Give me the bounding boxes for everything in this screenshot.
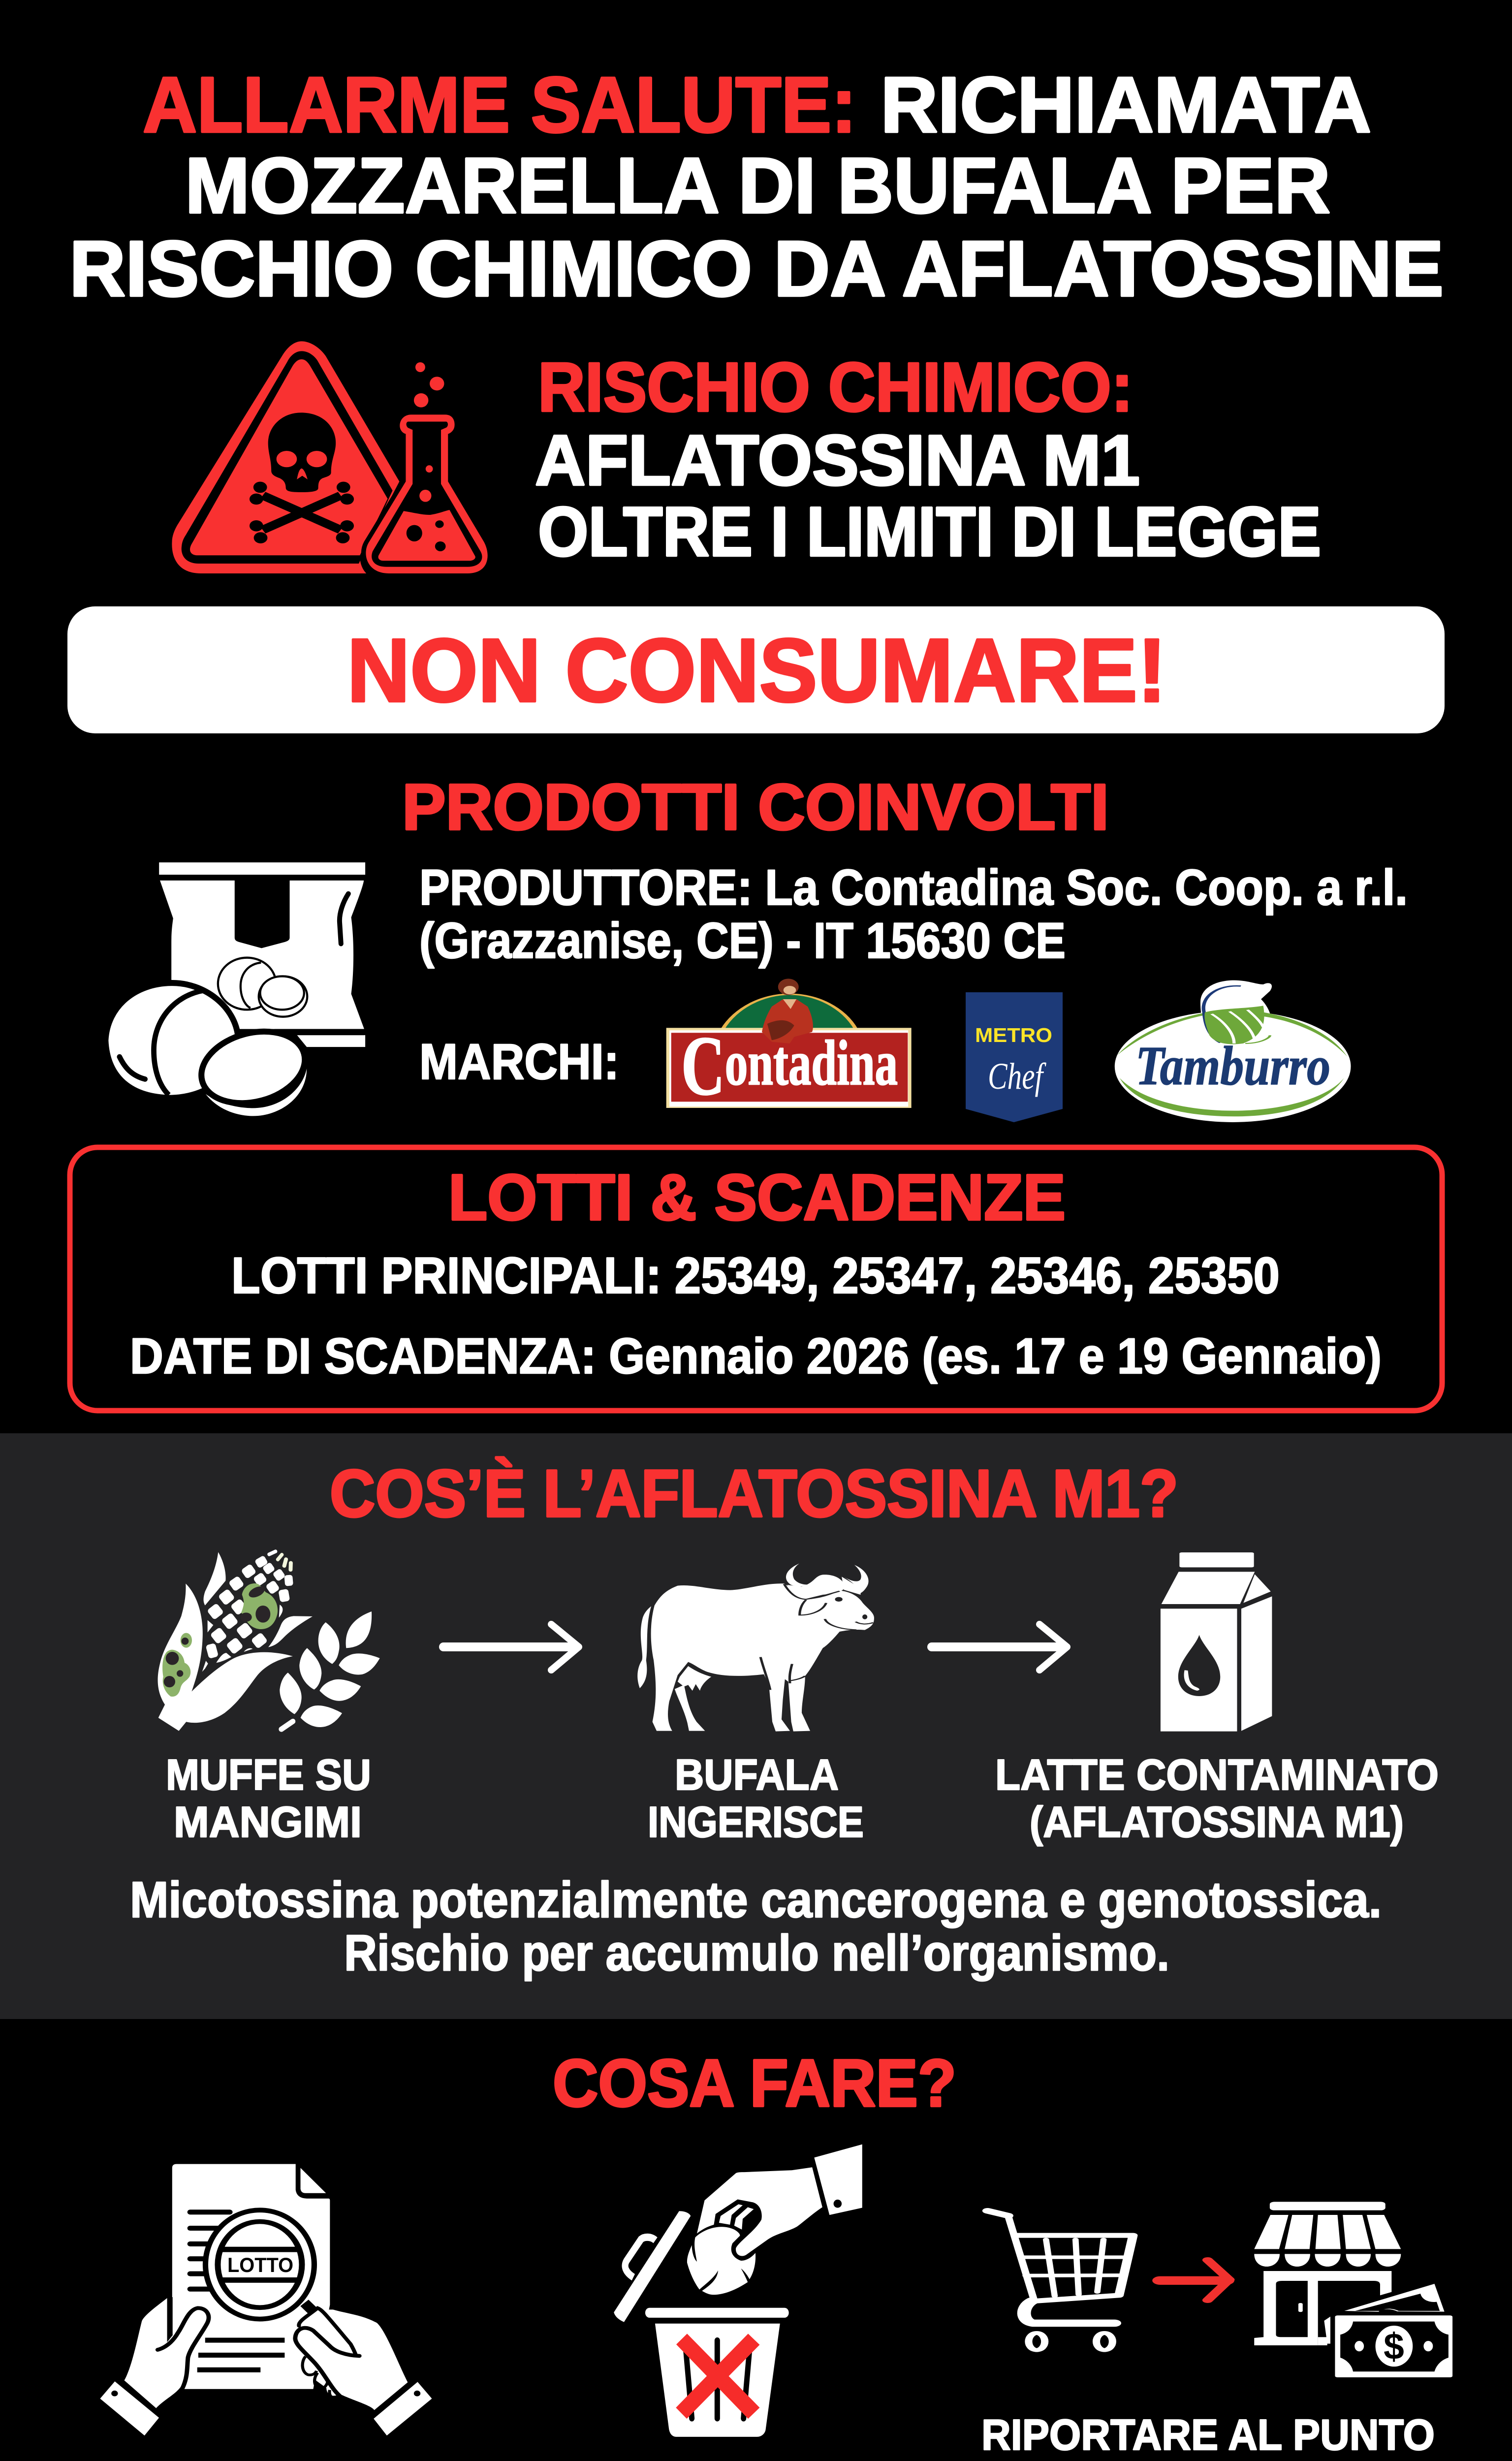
title: RISCHIO CHIMICO DA AFLATOSSINE — [69, 224, 1444, 313]
icon: milk carton — [1161, 1552, 1272, 1732]
text: descrizione micotossina — [130, 1871, 1382, 1981]
icon: document with magnifier and hands — [100, 2164, 432, 2435]
logo: contadina: C — [681, 1019, 725, 1113]
panel: cos'è l'aflatossina — [0, 1433, 1512, 2019]
callout: non consumare: NON CONSUMARE! — [347, 620, 1166, 721]
logo: tamburro — [1115, 980, 1351, 1122]
logo: metro chef: METRO — [975, 1024, 1052, 1046]
label: bufala ingerisce — [648, 1750, 864, 1846]
callout: non consumare — [67, 606, 1445, 733]
logo: tamburro: Tamburro — [1135, 1036, 1330, 1097]
title — [69, 61, 1444, 313]
panel: lotti e scadenze — [70, 1147, 1442, 1411]
arrow: muffe to bufala — [443, 1624, 579, 1670]
logo: metro chef — [966, 992, 1063, 1122]
logo: metro chef: Chef — [988, 1056, 1046, 1097]
text: descrizione micotossina: Micotossina potenzialmente cancerogena e genotossica. — [130, 1871, 1382, 1928]
icon: store with banknotes: $ — [1384, 2326, 1404, 2367]
heading: rischio chimico: RISCHIO CHIMICO: — [538, 348, 1133, 426]
heading: prodotti coinvolti: PRODOTTI COINVOLTI — [402, 771, 1109, 843]
text: lotti principali: LOTTI PRINCIPALI: 25349, 25347, 25346, 25350 — [231, 1247, 1280, 1304]
heading: lotti: LOTTI & SCADENZE — [448, 1161, 1066, 1233]
icon: document with magnifier and hands: LOTTO — [227, 2253, 293, 2276]
heading: cos'è: COS’È L’AFLATOSSINA M1? — [330, 1456, 1178, 1531]
title: MOZZARELLA DI BUFALA PER — [185, 141, 1330, 229]
heading: rischio chimico: AFLATOSSINA M1 — [535, 420, 1140, 500]
arrow: cart to store — [1161, 2260, 1229, 2300]
heading: rischio chimico: OLTRE I LIMITI DI LEGGE — [538, 493, 1321, 571]
icon: store with banknotes — [1254, 2202, 1452, 2377]
icon: shopping cart — [988, 2211, 1133, 2350]
label: muffe su mangimi: MUFFE SU — [166, 1750, 371, 1799]
label: muffe su mangimi — [166, 1750, 371, 1846]
icon: hazard triangle with skull and flask — [172, 341, 488, 573]
icon: buffalo — [637, 1564, 874, 1732]
logo: contadina — [666, 978, 912, 1113]
text: produttore: PRODUTTORE: La Contadina Soc. Coop. a r.l. — [419, 859, 1408, 915]
label: latte contaminato: LATTE CONTAMINATO — [995, 1750, 1439, 1799]
heading: cosa fare: COSA FARE? — [553, 2046, 956, 2120]
label: muffe su mangimi: MANGIMI — [174, 1798, 362, 1846]
text: date di scadenza: DATE DI SCADENZA: Gennaio 2026 (es. 17 e 19 Gennaio) — [130, 1328, 1382, 1384]
text: produttore — [419, 859, 1408, 969]
icon: mozzarella package — [105, 862, 365, 1116]
text: descrizione micotossina: Rischio per accumulo nell’organismo. — [344, 1925, 1169, 1981]
icon: mouldy corn — [158, 1549, 380, 1731]
label: latte contaminato: (AFLATOSSINA M1) — [1030, 1798, 1404, 1846]
label: bufala ingerisce: BUFALA — [675, 1750, 839, 1799]
title: ALLARME SALUTE: — [143, 61, 856, 149]
label: riportare al punto vendita: RIPORTARE AL PUNTO — [981, 2410, 1435, 2459]
title: RICHIAMATA — [881, 61, 1371, 149]
arrow: bufala to latte — [932, 1624, 1067, 1670]
icon: hand and trash bin with red cross — [614, 2145, 862, 2437]
label: marchi: MARCHI: — [419, 1034, 619, 1090]
label: latte contaminato — [995, 1750, 1439, 1846]
logo: contadina: ontadina — [725, 1028, 898, 1099]
heading: rischio chimico — [535, 348, 1321, 571]
label: bufala ingerisce: INGERISCE — [648, 1798, 864, 1846]
text: produttore: (Grazzanise, CE) - IT 15630 CE — [419, 913, 1066, 969]
